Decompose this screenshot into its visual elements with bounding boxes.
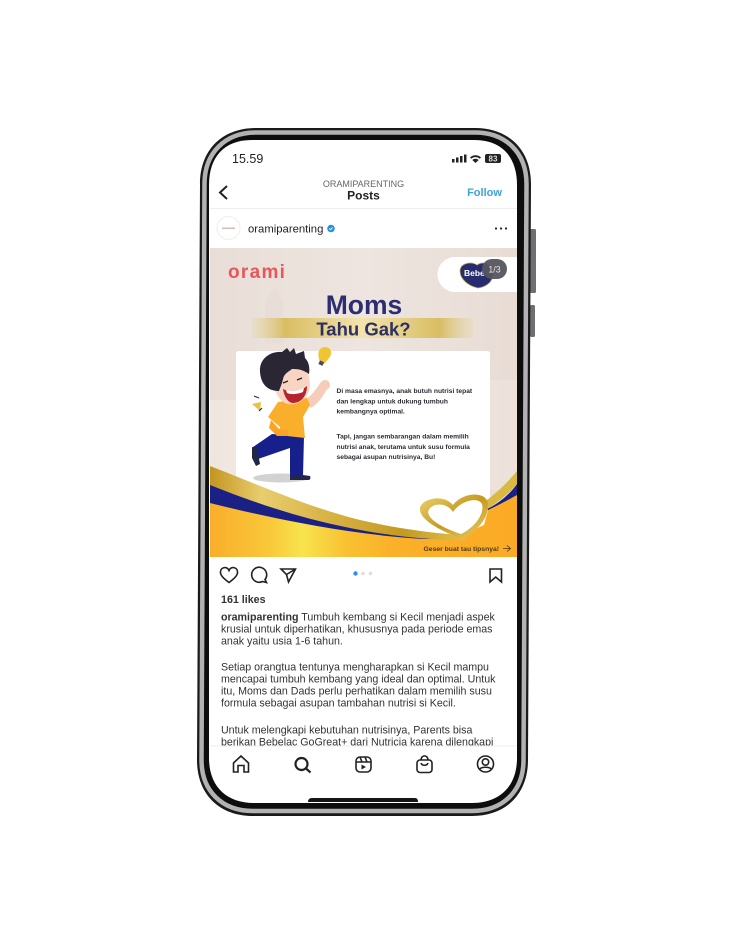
header: account label: ORAMIPARENTING (323, 179, 404, 189)
raised arm (305, 382, 328, 408)
caption: formula sebagai asupan tambahan nutrisi si Kecil. (221, 698, 456, 710)
action row (220, 567, 502, 582)
hair (260, 348, 309, 391)
swipe hint: Geser buat tau tipsnya! (424, 546, 499, 553)
white content card (236, 351, 490, 536)
illustration: running boy (252, 347, 331, 482)
heading: tahu gak: Tahu Gak? (316, 318, 411, 340)
side buttons (530, 229, 536, 337)
icon: search (296, 758, 310, 772)
icon: profile (478, 756, 494, 772)
action marks (252, 402, 261, 411)
shoes (252, 447, 260, 466)
shirt (268, 398, 310, 438)
card text: paragraph 2 (336, 434, 470, 461)
avatar (217, 216, 240, 240)
caption: oramiparenting Tumbuh kembang si Kecil menjadi aspek (221, 612, 495, 624)
caption: Setiap orangtua tentunya mengharapkan si Kecil mampu (221, 662, 489, 674)
phone screen (209, 140, 517, 803)
carousel dots (353, 571, 372, 576)
brand pill: 1/3 (488, 264, 501, 274)
slide counter (482, 259, 507, 279)
status bar time: 15.59 (232, 152, 263, 166)
caption: mencapai tumbuh kembang yang ideal dan optimal. Untuk (221, 674, 496, 686)
phone body (197, 128, 531, 816)
likes count: 161 likes (221, 594, 266, 606)
heading band (252, 318, 473, 338)
card text: paragraph 1: kembangnya optimal. (336, 408, 405, 416)
status bar icons: 83 (489, 154, 498, 164)
caption: anak yaitu usia 1-6 tahun. (221, 636, 343, 648)
card text: paragraph 1: Di masa emasnya, anak butuh nutrisi tepat (336, 388, 473, 395)
icon: home (234, 756, 248, 772)
card text: paragraph 1 (336, 388, 473, 416)
icon: share (281, 569, 296, 582)
mouth (283, 386, 307, 403)
card text: paragraph 2: Tapi, jangan sembarangan dalam memilih (336, 434, 469, 440)
profile row (217, 216, 507, 240)
username: oramiparenting (248, 224, 323, 236)
face (274, 364, 310, 404)
post image panel (210, 248, 517, 557)
shadow (253, 474, 309, 482)
header: back arrow (220, 186, 227, 199)
bottom navigation (234, 756, 494, 772)
icon: reels (356, 757, 371, 772)
brand pill (438, 257, 517, 292)
heading: moms: Moms (326, 290, 402, 320)
caption (221, 612, 496, 748)
header: posts title: Posts (347, 188, 380, 202)
gold heart (420, 495, 488, 539)
brand heart (460, 263, 493, 288)
caption: itu, Moms dan Dads perlu perhatikan dalam memilih susu (221, 686, 492, 698)
hand (320, 380, 330, 390)
navy swoosh (210, 484, 445, 539)
more menu (495, 227, 507, 230)
caption: berikan Bebelac GoGreat+ dari Nutricia karena dilengkapi (221, 736, 493, 748)
caption: krusial untuk diperhatikan, khususnya pada periode emas (221, 624, 493, 636)
gold swoosh (210, 466, 466, 540)
caption: Untuk melengkapi kebutuhan nutrisinya, Parents bisa (221, 724, 472, 736)
card text: paragraph 1: dan lengkap untuk dukung tumbuh (336, 398, 448, 406)
icon: comment (252, 567, 267, 582)
orami logo: orami (228, 262, 286, 283)
status bar icons (452, 154, 501, 164)
light bulb (318, 347, 331, 366)
icon: bookmark (490, 569, 502, 582)
card text: paragraph 2: sebagai asupan nutrisinya, Bu! (336, 454, 435, 461)
brand pill: Bebe (464, 268, 485, 278)
card text: paragraph 2: nutrisi anak, terutama untuk susu formula (336, 444, 470, 451)
icon: heart (220, 568, 238, 582)
verified badge (327, 225, 335, 232)
header: follow button: Follow (467, 187, 502, 199)
background room (210, 285, 517, 490)
bottom nav background (210, 746, 517, 756)
orange base (210, 494, 517, 557)
eyes (283, 378, 302, 383)
icon: shop (417, 756, 432, 772)
tucked arm (269, 420, 288, 436)
home indicator (308, 798, 418, 802)
legs (253, 434, 304, 476)
